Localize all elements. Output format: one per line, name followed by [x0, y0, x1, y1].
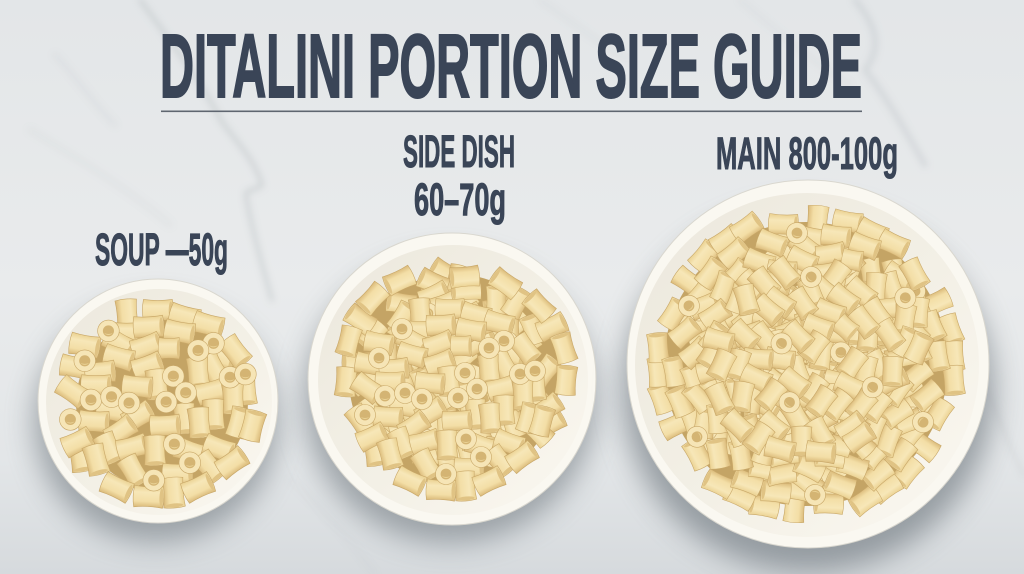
label: side dish portion: [403, 126, 515, 225]
title underline: [161, 110, 862, 112]
pasta: main portion: [614, 167, 998, 561]
bowl: soup: [34, 279, 278, 542]
infographic: ditalini portion size guide: SIDE DISH: [403, 126, 515, 177]
pasta: soup portion: [54, 298, 267, 509]
pasta: side dish portion: [290, 220, 607, 511]
label: side dish portion: 60–70g: [414, 174, 506, 225]
bowl: main: [614, 167, 998, 572]
label: soup portion: SOUP —50g: [95, 224, 228, 275]
bowl: side dish: [290, 220, 607, 543]
